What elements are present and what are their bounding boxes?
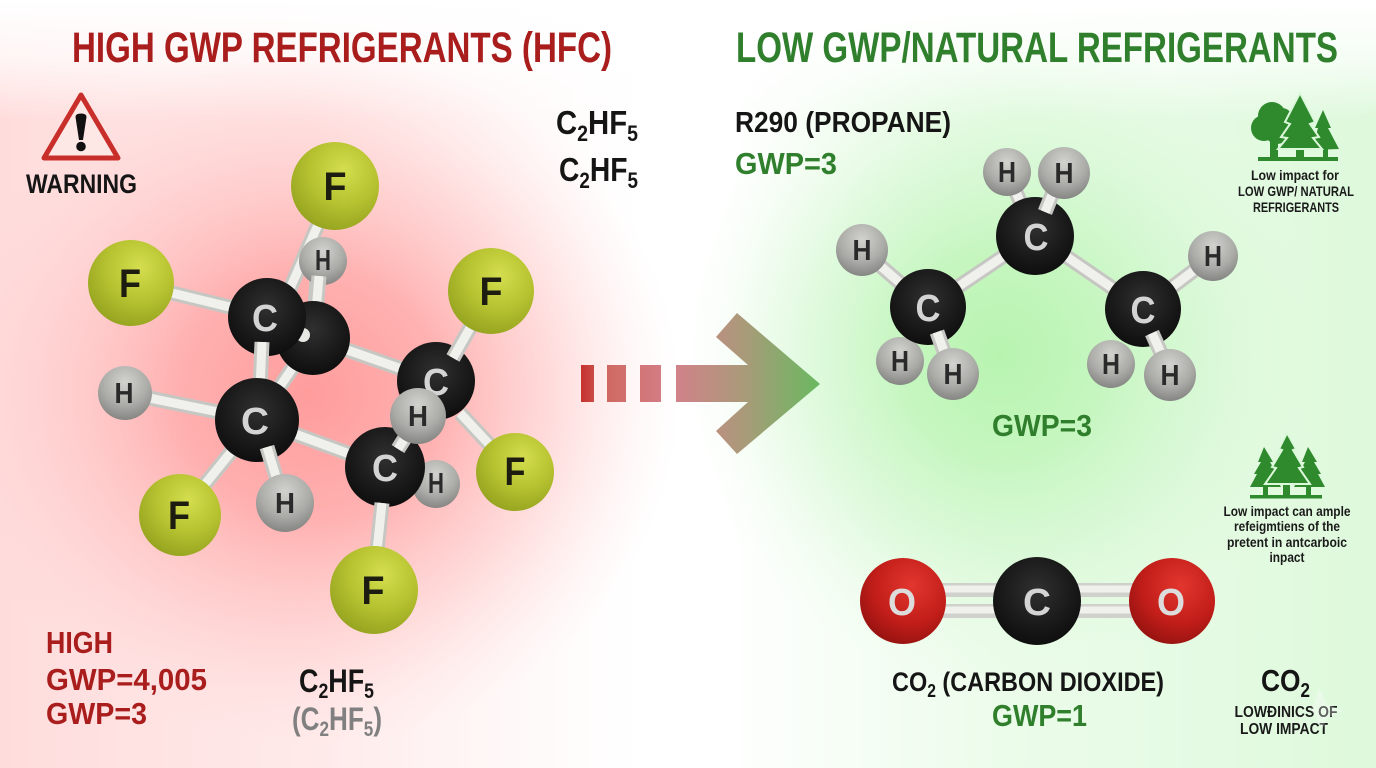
atoms: rear hydrogens: H xyxy=(891,346,909,378)
atom: hydrogen rear top: H xyxy=(315,245,331,277)
text: formula bottom left: 2 xyxy=(318,680,328,703)
atoms: rear hydrogens xyxy=(876,337,1135,388)
atom: carbon right: C xyxy=(423,362,449,404)
bond: hydrogen to rear carbon xyxy=(316,276,319,312)
text: low impact caption two xyxy=(1224,503,1351,565)
text: high GWP values: GWP=3 xyxy=(46,696,147,731)
decoration: faint sparkle over caption xyxy=(1310,688,1343,730)
atom: carbon centre xyxy=(996,197,1074,275)
atoms: front hydrogens: H xyxy=(1054,158,1074,190)
label: warning: WARNING xyxy=(26,169,137,199)
atom: fluorine right: F xyxy=(480,270,502,314)
title: high GWP refrigerants: HIGH GWP REFRIGERANTS (HFC) xyxy=(72,24,612,72)
atom: fluorine bottom: F xyxy=(362,569,384,613)
formula labels top centre xyxy=(556,104,638,193)
text: propane GWP top: GWP=3 xyxy=(735,146,837,181)
formula labels top centre: HF xyxy=(590,151,628,188)
text: R290 propane: R290 (PROPANE) xyxy=(735,107,951,139)
atom: carbon upper left xyxy=(228,278,306,356)
formula labels top centre: C xyxy=(559,151,583,188)
atoms: front hydrogens: H xyxy=(998,157,1016,189)
atom: carbon lower left xyxy=(215,378,299,462)
text: formula bottom left: HF xyxy=(329,701,364,737)
text: high GWP values: GWP=4,005 xyxy=(46,662,207,697)
formula labels top centre: 2 xyxy=(577,121,588,146)
bond: carbon lower left to hydrogen xyxy=(267,447,280,490)
text: low impact caption two: Low impact can ample xyxy=(1224,503,1351,519)
atoms: front hydrogens xyxy=(836,147,1238,401)
text: CO2 label: 2 xyxy=(1301,680,1310,702)
atom: carbon right: C xyxy=(1130,290,1156,332)
atom: carbon lower xyxy=(345,427,425,507)
atom: oxygen left: O xyxy=(888,582,916,624)
text: high GWP values xyxy=(46,625,207,731)
atom: hydrogen bottom xyxy=(256,474,314,532)
icon: deciduous and pine trees xyxy=(1251,93,1339,161)
atom: oxygen right: O xyxy=(1157,582,1185,624)
formula labels top centre: HF xyxy=(588,104,627,141)
text: formula bottom left: 5 xyxy=(364,680,374,703)
atom: carbon left xyxy=(890,269,966,345)
text: low impact caption three: LOWÐINICS OF xyxy=(1234,704,1338,721)
atom: carbon centre: C xyxy=(1024,217,1048,259)
text: formula bottom left: C xyxy=(299,663,322,699)
atom: fluorine bottom xyxy=(330,546,418,634)
text: CO2 GWP value: GWP=1 xyxy=(992,698,1087,733)
atom: hydrogen front: H xyxy=(408,401,428,433)
atoms: front hydrogens: H xyxy=(852,235,872,267)
text: CO2 carbon dioxide name: CO xyxy=(892,667,932,697)
atom: fluorine top: F xyxy=(324,165,346,209)
atom: fluorine left: F xyxy=(119,262,141,306)
atom: hydrogen left xyxy=(98,366,152,420)
bond: stub between carbons xyxy=(296,328,310,342)
text: low impact caption one xyxy=(1238,167,1354,215)
atom: carbon right xyxy=(397,342,475,420)
atom: fluorine right xyxy=(448,248,534,334)
atom: hydrogen left: H xyxy=(114,378,134,410)
atom: fluorine left xyxy=(88,240,174,326)
atom: oxygen left xyxy=(860,558,946,644)
arrow: dashed transition from high to low GWP xyxy=(581,313,820,454)
text: CO2 carbon dioxide name: 2 xyxy=(927,681,936,701)
atom: carbon upper left: C xyxy=(252,298,278,340)
text: CO2 carbon dioxide name: (CARBON DIOXIDE) xyxy=(936,667,1164,697)
atom: carbon right xyxy=(1105,271,1181,347)
atom: carbon lower left: C xyxy=(241,401,269,443)
text: formula bottom left: HF xyxy=(328,663,364,699)
bond: lower carbon to fluorine xyxy=(376,503,382,560)
atom: carbon left: C xyxy=(916,288,940,330)
bonds: hydrogen stubs over carbons xyxy=(937,185,1165,362)
bond: carbon to carbon vertical xyxy=(260,342,262,390)
atom: hydrogen front xyxy=(390,388,446,449)
formula labels top centre: 2 xyxy=(579,168,590,193)
text: formula bottom left: ) xyxy=(373,701,382,737)
atom: hydrogen bottom: H xyxy=(275,488,295,520)
atom: hydrogen rear top xyxy=(299,237,347,285)
text: formula bottom left xyxy=(292,663,382,741)
molecule: carbon dioxide xyxy=(860,557,1215,645)
text: low impact caption three: LOW IMPACT xyxy=(1240,721,1328,738)
atom: fluorine top xyxy=(291,142,379,230)
atoms: front hydrogens: H xyxy=(1204,241,1222,273)
atom: hydrogen rear right: H xyxy=(428,468,444,500)
text: low impact caption two: pretent in antcarboic xyxy=(1227,534,1347,550)
text: formula bottom left: 2 xyxy=(320,718,329,741)
text: CO2 label: CO xyxy=(1261,663,1308,698)
atom: carbon centre xyxy=(993,557,1081,645)
atom: carbon rear xyxy=(276,301,350,375)
formula labels top centre: 5 xyxy=(628,168,638,193)
text: low impact caption two: refeigmtiens of the xyxy=(1234,518,1340,534)
text: low impact caption three xyxy=(1234,704,1338,738)
text: formula bottom left: (C xyxy=(292,701,326,737)
atom: fluorine lower right xyxy=(476,433,554,511)
atom: carbon centre: C xyxy=(1023,582,1051,624)
text: low impact caption one: REFRIGERANTS xyxy=(1253,199,1339,215)
formula labels top centre: C xyxy=(556,104,580,141)
text: low impact caption two: inpact xyxy=(1270,549,1305,565)
molecule: propane xyxy=(836,147,1238,401)
text: high GWP values: HIGH xyxy=(46,625,113,660)
text: formula bottom left: 5 xyxy=(364,718,374,741)
atom: fluorine lower left xyxy=(139,474,221,556)
atom: hydrogen rear right xyxy=(412,460,460,508)
molecule: HFC xyxy=(88,142,554,634)
icon: three pine trees xyxy=(1250,433,1325,498)
atom: fluorine lower right: F xyxy=(504,450,526,494)
atom: fluorine lower left: F xyxy=(168,494,190,538)
text: low impact caption one: Low impact for xyxy=(1251,167,1339,183)
bonds: right carbon to fluorines xyxy=(453,291,515,472)
atom: oxygen right xyxy=(1129,558,1215,644)
formula labels top centre: 5 xyxy=(627,121,638,146)
atoms: front hydrogens: H xyxy=(1160,360,1180,392)
icon: warning triangle xyxy=(44,95,118,158)
text: propane GWP centre: GWP=3 xyxy=(992,408,1092,443)
atom: carbon lower: C xyxy=(372,448,398,490)
atoms: front hydrogens: H xyxy=(944,359,962,391)
atoms: rear hydrogens: H xyxy=(1102,349,1120,381)
